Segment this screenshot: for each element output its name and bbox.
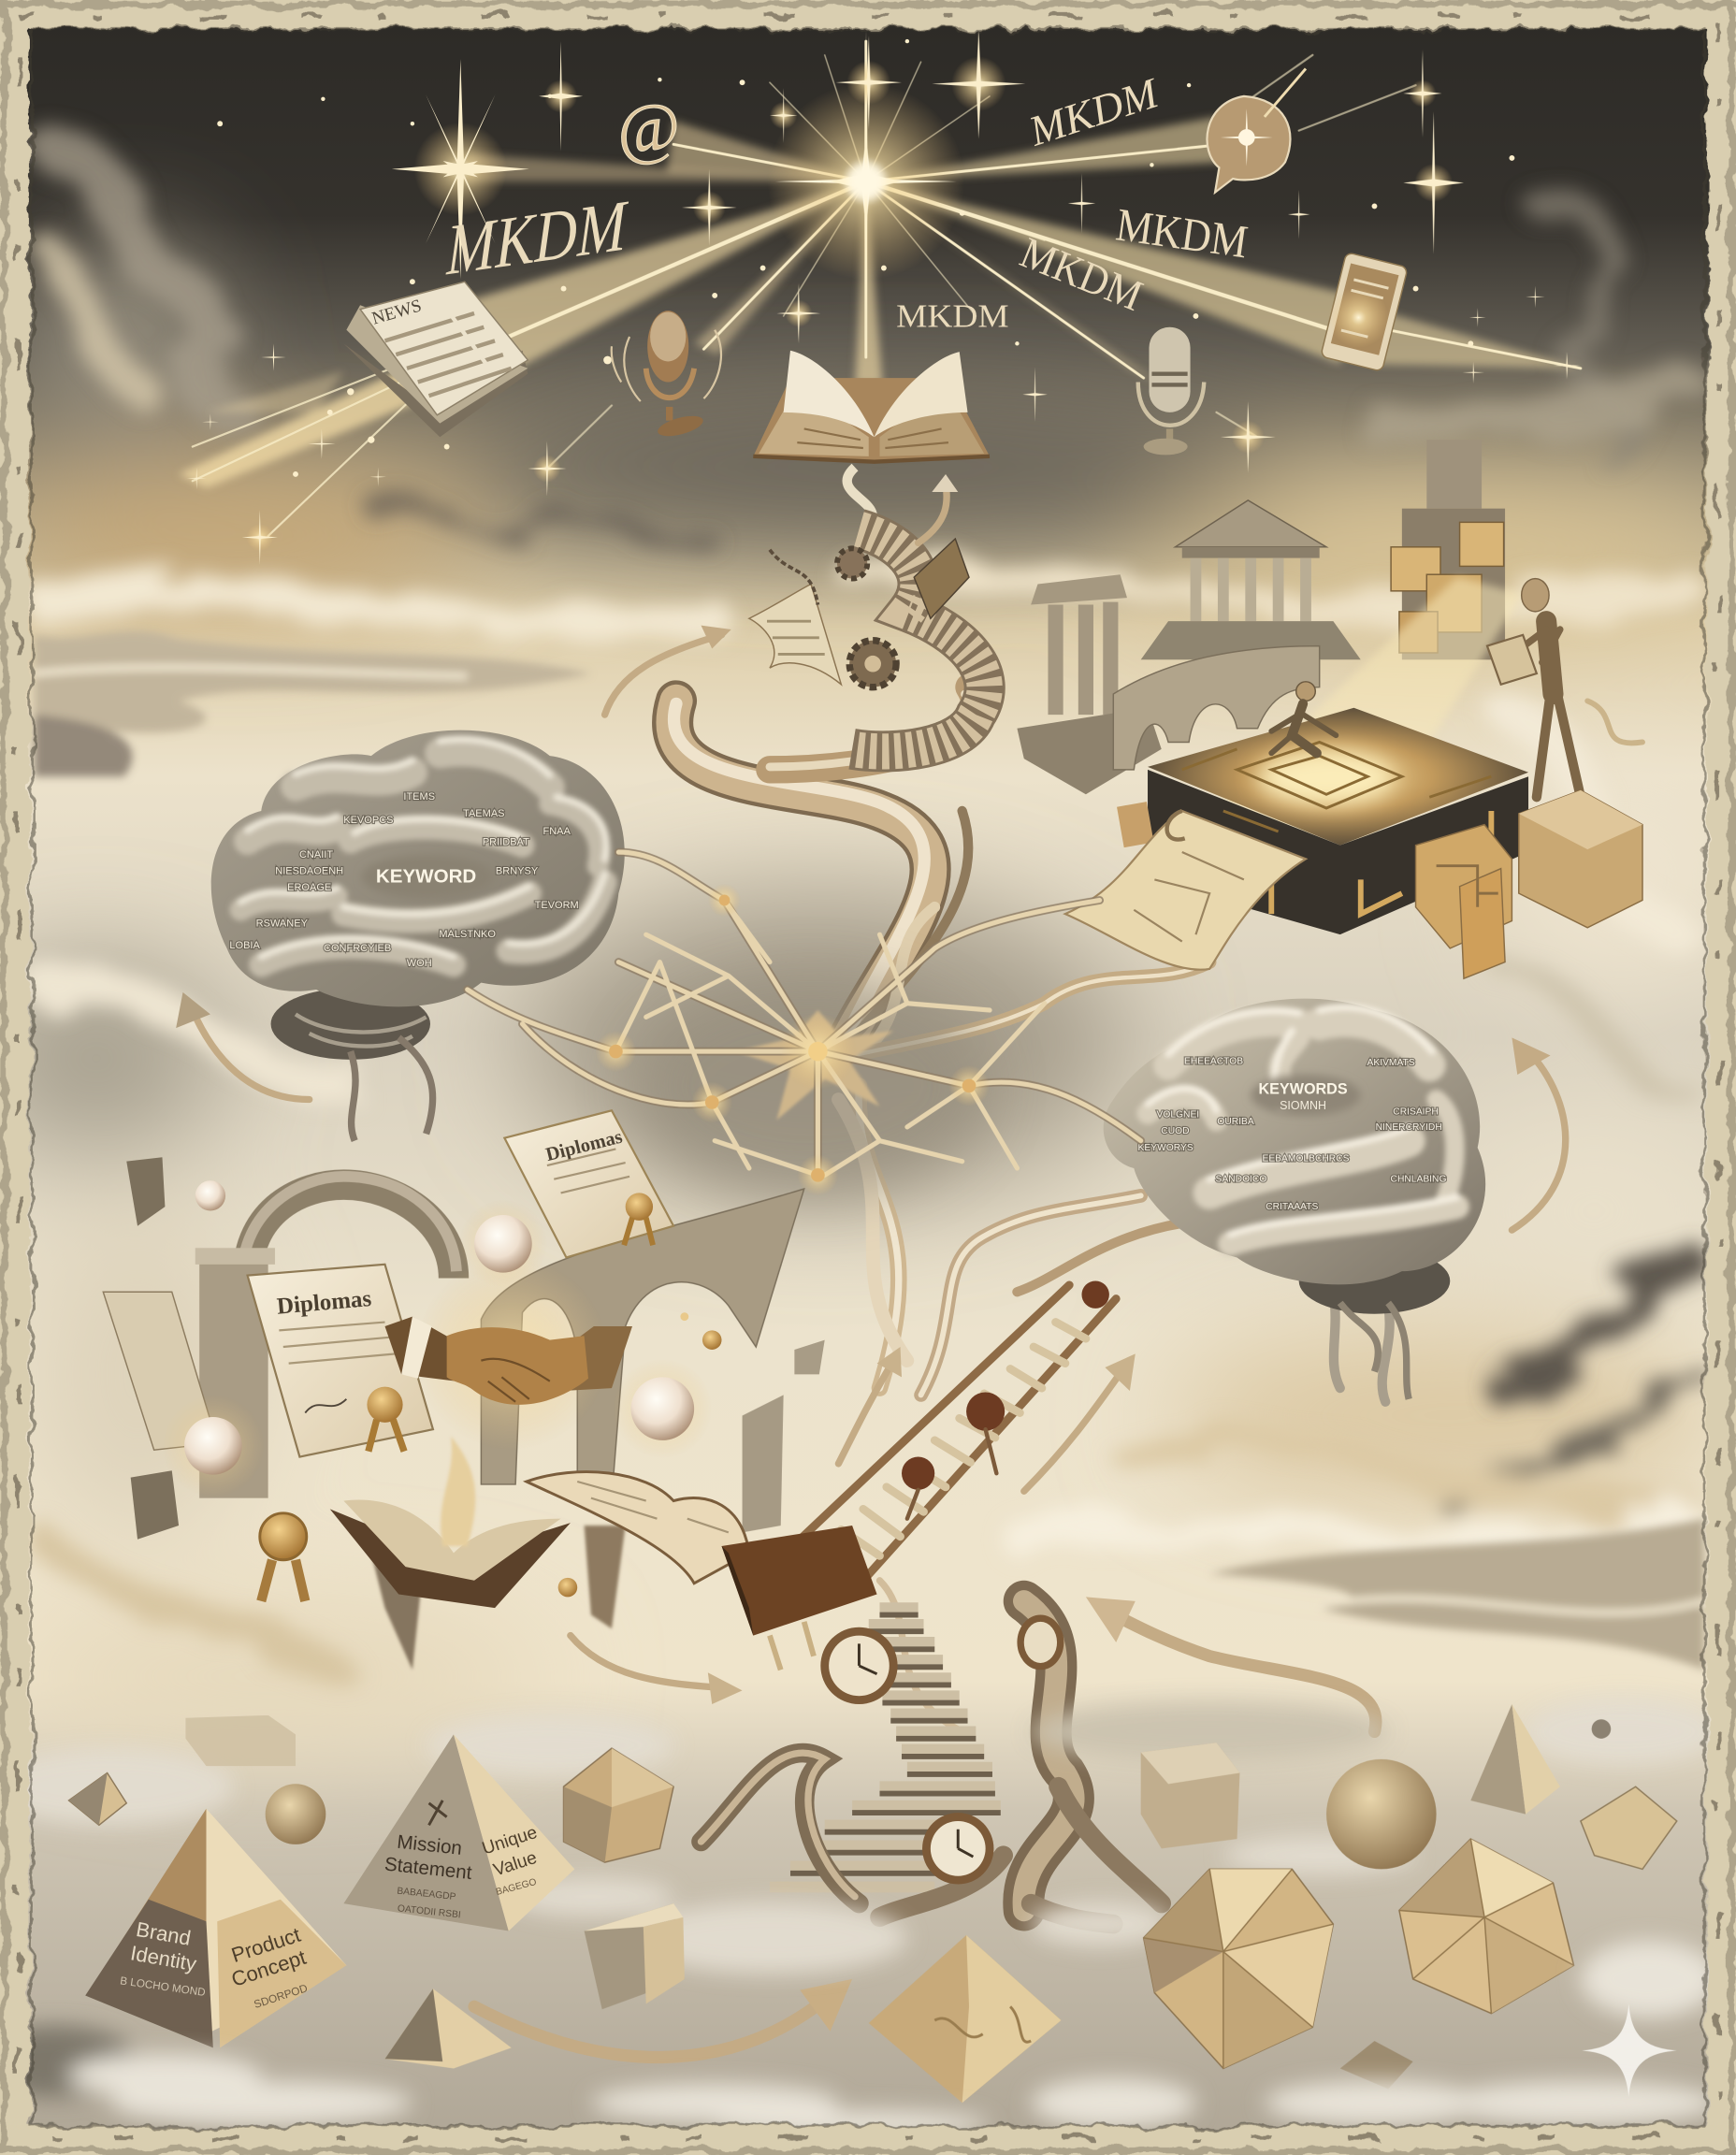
brand pyramid with labels: Concept (228, 1945, 309, 1991)
neural network (468, 852, 1141, 1195)
right brain with keywords: VOLGNEI (1157, 1110, 1199, 1121)
right brain with keywords: SIOMNH (1280, 1099, 1326, 1112)
left brain with keywords: CNAIIT (299, 849, 333, 861)
left brain with keywords: WOH (407, 958, 432, 969)
scattered stars (187, 29, 1581, 565)
winding stream ribbons (673, 687, 1390, 1731)
melting clocks (820, 1615, 1063, 1885)
mission pyramid with labels: BAGEGO (495, 1877, 538, 1898)
diploma front (103, 1265, 433, 1457)
robot kneeling (1271, 682, 1336, 753)
MKDM word centre: MKDM (896, 298, 1009, 335)
floating circuit platform (1148, 708, 1528, 934)
icon: tablet (1318, 252, 1408, 371)
left brain with keywords (211, 730, 625, 1141)
left brain with keywords: MALSTNKO (439, 929, 496, 940)
left brain with keywords: KEVOPCS (343, 815, 394, 826)
handshake (385, 1257, 632, 1450)
left brain with keywords: NIESDAOENH (275, 866, 343, 877)
icon: newspaper (343, 282, 528, 437)
bottom clouds (0, 1699, 1718, 1974)
left brain with keywords: EROAGE (287, 882, 331, 893)
brand pyramid with labels (85, 1809, 346, 2047)
mission pyramid with labels: BABAEAGDP (397, 1886, 456, 1902)
scattered solids (69, 1704, 1677, 2103)
MKDM word top right: MKDM (1022, 68, 1166, 155)
open book with closed leather tome (527, 1472, 877, 1670)
brand pyramid with labels: Product (228, 1923, 303, 1967)
right brain with keywords: KEYWORYS (1138, 1143, 1194, 1153)
blueprint scroll (1065, 811, 1306, 970)
right brain with keywords: CUOD (1161, 1126, 1190, 1136)
left brain with keywords: BRNYSY (496, 866, 539, 877)
diploma rear: Diplomas (543, 1127, 625, 1165)
brand pyramid with labels: B LOCHO MOND (119, 1974, 206, 1999)
right brain with keywords: NINERCRYIDH (1376, 1122, 1442, 1133)
brand pyramid with labels: Brand (135, 1917, 193, 1950)
right brain with keywords: EHEEACTOB (1184, 1056, 1243, 1066)
light beam from robot (1209, 577, 1523, 852)
left brain with keywords: ITEMS (403, 791, 435, 803)
mission pyramid with labels: Mission (396, 1831, 463, 1859)
left brain with keywords: TAEMAS (463, 808, 505, 819)
right brain with keywords: CRISAIPH (1393, 1107, 1439, 1118)
MKDM word lower right: MKDM (1014, 228, 1149, 321)
landscape: distant horizon left (35, 631, 591, 776)
MKDM word left: MKDM (445, 185, 629, 291)
mission pyramid with labels: Unique (480, 1823, 540, 1859)
right brain with keywords: EEBAMOLBCHRCS (1263, 1154, 1350, 1164)
gold medal (260, 1513, 307, 1601)
right brain with keywords: AKIVMATS (1367, 1058, 1415, 1068)
descending staircase (770, 1608, 1001, 1887)
twisted tree roots (701, 1601, 1162, 1924)
diploma rear (504, 1110, 673, 1257)
light beams radiating from star (179, 41, 1581, 536)
mission pyramid with labels: Statement (383, 1853, 473, 1884)
right brain with keywords: KEYWORDS (1258, 1081, 1348, 1098)
robot standing with tablet (1487, 579, 1642, 797)
MKDM word right: MKDM (1113, 197, 1251, 268)
pearls (162, 1180, 722, 1597)
icon: right microphone (1138, 327, 1204, 455)
icon: speech bubble (1207, 68, 1306, 193)
diploma front: Diplomas (276, 1286, 372, 1320)
left brain with keywords: LOBIA (229, 940, 261, 951)
right brain with keywords: CRITAAATS (1266, 1202, 1318, 1212)
sparkle watermark (1582, 2003, 1677, 2097)
upward arrows (176, 474, 1566, 2058)
left brain with keywords: PRIIDBAT (483, 837, 529, 848)
mission pyramid with labels (343, 1734, 574, 1931)
ruined stone arches (126, 1157, 825, 1670)
right brain with keywords (1104, 999, 1485, 1399)
mission pyramid with labels: OATODII RSBI (397, 1903, 461, 1920)
icon: newspaper: NEWS (369, 296, 424, 329)
left brain with keywords: TEVORM (535, 900, 579, 911)
right brain with keywords: OURIBA (1217, 1117, 1254, 1127)
right brain with keywords: CHNLABING (1391, 1175, 1446, 1185)
ruined temple and arched bridge (1017, 500, 1361, 794)
landscape: distant horizon right (1209, 1519, 1704, 1670)
left open leather book (330, 1437, 571, 1608)
icon: left microphone (612, 311, 721, 440)
left brain with keywords: KEYWORD (376, 865, 476, 887)
tower of gold blocks (1391, 440, 1505, 659)
left brain with keywords: FNAA (542, 826, 571, 837)
brand pyramid with labels: Identity (129, 1941, 198, 1975)
right brain with keywords: SANDOICO (1216, 1175, 1266, 1185)
brand pyramid with labels: SDORPOD (253, 1982, 309, 2011)
left brain with keywords: RSWANEY (256, 918, 309, 929)
icon: at sign: @ (613, 87, 684, 169)
icon: open book (753, 351, 990, 462)
left brain with keywords: CONFRCYIEB (324, 943, 391, 954)
rope ladder with wax seals (797, 1280, 1116, 1581)
central bright star (767, 30, 965, 333)
foreground clouds (0, 1941, 1718, 2137)
spiral staircase with scroll and gears (749, 468, 985, 751)
mission pyramid with labels: Value (491, 1848, 540, 1880)
pedestal and gold blocks (1117, 790, 1642, 978)
